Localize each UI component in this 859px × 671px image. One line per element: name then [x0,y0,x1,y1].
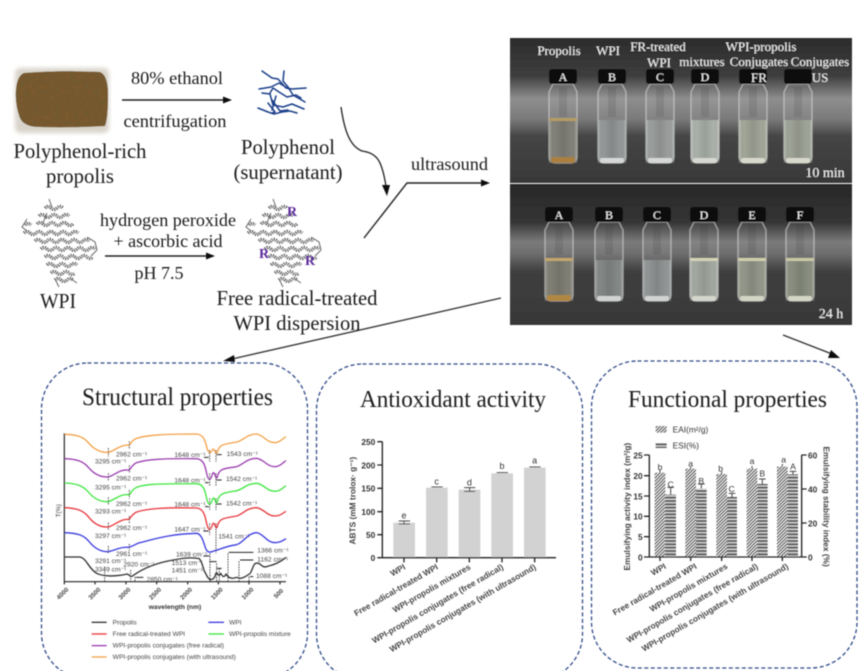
peak labels: 2961 cm⁻¹ [116,551,148,558]
significance letters: a [750,456,755,466]
icon: radical-treated protein: R [287,205,298,220]
peak labels: 2962 cm⁻¹ [116,525,148,532]
right tick labels: 60 [808,450,818,460]
photo caption: FR-treated WPI [630,39,686,70]
arrow: ultrasound [364,180,490,238]
icon: radical-treated protein [246,199,321,287]
category labels: Free radical-treated WPI [611,561,698,617]
photo caption: conjugates US: Conjugates [791,54,849,69]
left tick labels: 15 [633,491,643,501]
label: propolis: propolis [46,164,114,188]
category labels: WPI-propolis mixtures [391,562,473,615]
peak labels: 1648 cm⁻¹ [174,452,206,459]
peak labels: 1543 cm⁻¹ [227,451,259,458]
category labels: WPI [388,562,407,578]
peak labels: 1542 cm⁻¹ [226,500,258,507]
axis tick labels: 4000 [55,586,71,601]
label: 80% ethanol: 80% ethanol [131,68,223,88]
curve: propolis [65,557,286,580]
significance letters: C [729,484,735,494]
vial B 10 min [598,69,626,163]
legend: EAI(m²/g) [673,425,709,435]
heading: structural properties: Structural properties [82,384,273,411]
label: WPI dispersion: WPI dispersion [234,311,361,335]
vial E 10 min [739,69,767,163]
label: pH: pH 7.5 [134,263,184,283]
photo caption: FR-treated WPI: WPI [647,55,671,70]
significance letters: a [532,456,537,466]
photo caption: WPI-propolis conjugates FR [726,39,796,85]
axis tick labels [55,586,285,601]
panel: antioxidant activity [316,364,582,671]
significance letters: d [467,477,472,487]
axis tick labels: 2000 [179,586,194,601]
peak labels: 1648 cm⁻¹ [174,477,206,484]
category labels: Free radical-treated WPI [352,562,440,618]
y tick labels: 150 [361,484,376,494]
right tick labels [808,450,818,562]
peak labels: 1639 cm⁻¹ [176,551,208,558]
left axis title: Emulsifying activity index (m²/g) [622,443,632,571]
propolis photo [15,68,109,133]
axis tick labels: 1500 [210,586,225,601]
ESI bars [665,474,798,557]
heading: functional properties: Functional properties [628,387,827,413]
error bars [399,467,541,524]
photo caption: FR-treated WPI: FR-treated [630,39,686,54]
y tick labels: 50 [366,530,376,540]
peak labels: 3293 cm⁻¹ [95,509,127,516]
heading: antioxidant activity: Antioxidant activity [360,387,546,413]
axis tick labels: 500 [273,587,285,600]
peak labels: 1088 cm⁻¹ [256,573,288,580]
vial C 24 h: C [653,208,661,222]
photo panel: 24 h vials [510,184,852,325]
peak arrows [136,455,253,577]
significance letters: A [790,462,796,472]
peak labels: 3349 cm⁻¹ [95,567,127,574]
curve: propolis mixture [65,483,286,504]
y tick labels: 250 [361,437,376,447]
chart legend: WPI-propolis conjugates (free radical) [113,643,224,650]
peak labels: 2920 cm⁻¹ [123,562,155,569]
arrow: to structural properties [223,298,501,362]
vial D 10 min: D [701,70,710,84]
significance letters [658,455,796,494]
peak labels: 1366 cm⁻¹ [257,548,289,555]
significance letters [401,456,537,521]
photo caption: conjugates US: US [812,70,828,85]
left tick labels: 0 [638,552,643,562]
right tick labels: 0 [808,552,813,562]
arrow: ethanol extraction [122,96,232,104]
vial B 24 h [595,207,623,301]
vial C 10 min: C [656,70,664,84]
significance letters: b [658,462,663,472]
photo caption: WPI-propolis conjugates FR: Conjugates [730,54,788,69]
vial D 24 h: D [700,208,709,222]
label: reagents line 1: hydrogen peroxide [100,210,236,230]
curve: free radical WPI [65,508,286,529]
curve: free radical conjugates [65,458,286,479]
label: reagents line 2: + ascorbic acid [114,231,222,251]
EAI bars [655,467,788,557]
peak labels: 1647 cm⁻¹ [174,527,206,534]
left tick labels: 20 [633,471,643,481]
peak labels: 1162 cm⁻¹ [257,556,289,563]
emulsifying bar chart [611,425,832,653]
vial F 24 h: F [797,208,804,222]
chart legend: WPI-propolis mixture [229,631,291,638]
category labels: WPI-propolis conjugates (with ultrasound) [388,562,538,654]
axes [64,433,286,584]
chart legend: WPI [229,619,242,626]
photo caption: Propolis: Propolis [537,43,581,58]
label: free radical-treated: Free radical-treated [216,286,378,310]
y tick labels [361,437,376,563]
category labels: WPI-propolis conjugates (free radical) [625,561,760,645]
y tick labels: 0 [371,553,376,563]
peak labels: 1542 cm⁻¹ [226,476,258,483]
significance letters: C [668,480,674,490]
vial F 24 h [786,207,814,301]
panel: functional properties [592,361,857,668]
arrow: polyphenol curve [341,107,390,196]
significance letters: b [718,464,723,474]
y tick labels: 200 [361,460,376,470]
significance letters: e [401,511,406,521]
peak labels: 3291 cm⁻¹ [95,558,127,565]
label: supernatant: (supernatant) [234,160,342,184]
significance letters: c [434,476,439,486]
axis tick labels: 1000 [240,586,256,601]
photo caption: WPI-propolis conjugates FR: WPI-propolis [726,39,796,54]
icon: radical-treated protein: R [259,247,270,262]
left tick labels: 5 [638,532,643,542]
y tick labels: 100 [361,507,376,517]
left tick labels: 10 [633,512,643,522]
left tick labels: 25 [633,450,643,460]
vial C 24 h [643,207,671,301]
peak labels: 3295 cm⁻¹ [95,484,127,491]
error bars [660,464,796,497]
axis tick labels: 3500 [87,586,103,601]
axis title: wavelength: wavelength (nm) [148,604,201,611]
vial F 10 min [784,69,812,163]
label: centrifugation: centrifugation [124,111,226,131]
right axis title: Emulsifying stability index (%) [822,446,832,567]
curve: WPI [65,533,286,552]
vial C 10 min [646,69,674,163]
category labels: WPI-propolis conjugates (free radical) [370,562,505,645]
axes [644,455,807,561]
peak labels: 2962 cm⁻¹ [116,452,148,459]
significance letters: b [499,461,504,471]
peak labels [95,451,289,583]
icon: radical-treated protein: R [305,254,316,269]
axis title: T%: T(%) [57,504,63,517]
label: WPI: WPI [40,289,76,313]
peak labels: 3295 cm⁻¹ [95,458,127,465]
category labels: WPI-propolis conjugates (with ultrasound) [640,561,790,653]
legend: ESI(%) [673,441,699,451]
y axis title: ABTS (mM trolox· g⁻¹) [347,457,357,544]
ABTS bar chart [347,437,556,654]
peak labels: 1541 cm⁻¹ [218,534,250,541]
chart legend: Propolis [113,619,137,626]
peak labels: 1648 cm⁻¹ [174,502,206,509]
vial D 24 h [690,207,718,301]
vial A 10 min: A [559,70,568,84]
label: polyphenol: Polyphenol [241,135,335,159]
category labels: WPI-propolis mixtures [648,561,730,614]
axes [377,442,556,562]
peak labels: 3297 cm⁻¹ [95,533,127,540]
vial B 24 h: B [605,208,613,222]
arrow: radical treatment [105,252,215,260]
right tick labels: 40 [808,484,818,494]
vial E 24 h [738,207,766,301]
label: ultrasound: ultrasound [411,154,488,174]
vial D 10 min [691,69,719,163]
icon: WPI protein [22,199,97,287]
axis tick labels: 3000 [117,586,133,601]
peak labels: 1451 cm⁻¹ [172,568,204,575]
photo panel: 10 min vials [510,38,852,183]
peak labels: 2850 cm⁻¹ [147,576,179,583]
peak markers [105,441,249,581]
FTIR chart [55,433,291,661]
vial A 10 min [549,69,577,163]
photo caption: mixtures: mixtures [679,54,725,69]
category labels: WPI [649,561,668,578]
significance letters: B [759,469,765,479]
vial E 24 h: E [748,208,756,222]
significance letters: a [688,459,693,469]
peak labels: 2962 cm⁻¹ [116,475,148,482]
vial A 24 h [545,207,573,301]
photo caption: WPI: WPI [596,43,620,58]
panel: structural properties [42,363,308,671]
curve: ultrasound conjugates [65,434,286,453]
peak labels: 1513 cm⁻¹ [172,560,204,567]
vial A 24 h: A [555,208,564,222]
icon: polyphenol strands [258,71,306,114]
chart legend [92,619,291,661]
left tick labels [633,450,643,562]
vial B 10 min: B [608,70,616,84]
right tick labels: 20 [808,518,818,528]
chart legend: WPI-propolis conjugates (with ultrasound) [113,654,236,661]
photo label: 24 h: 24 h [819,307,843,322]
chart legend: Free radical-treated WPI [113,631,185,638]
significance letters: B [698,476,704,486]
photo caption: WPI-propolis conjugates FR: FR [751,70,767,85]
photo label: 10 min: 10 min [805,166,845,181]
peak labels: 2962 cm⁻¹ [116,501,148,508]
arrow: to functional properties [783,335,840,358]
photo caption: conjugates US [791,54,849,85]
bars [393,468,546,558]
significance letters: a [781,455,786,465]
legend [656,425,709,451]
label: polyphenol-rich propolis: Polyphenol-rich [14,139,147,163]
axis tick labels: 2500 [148,586,163,601]
